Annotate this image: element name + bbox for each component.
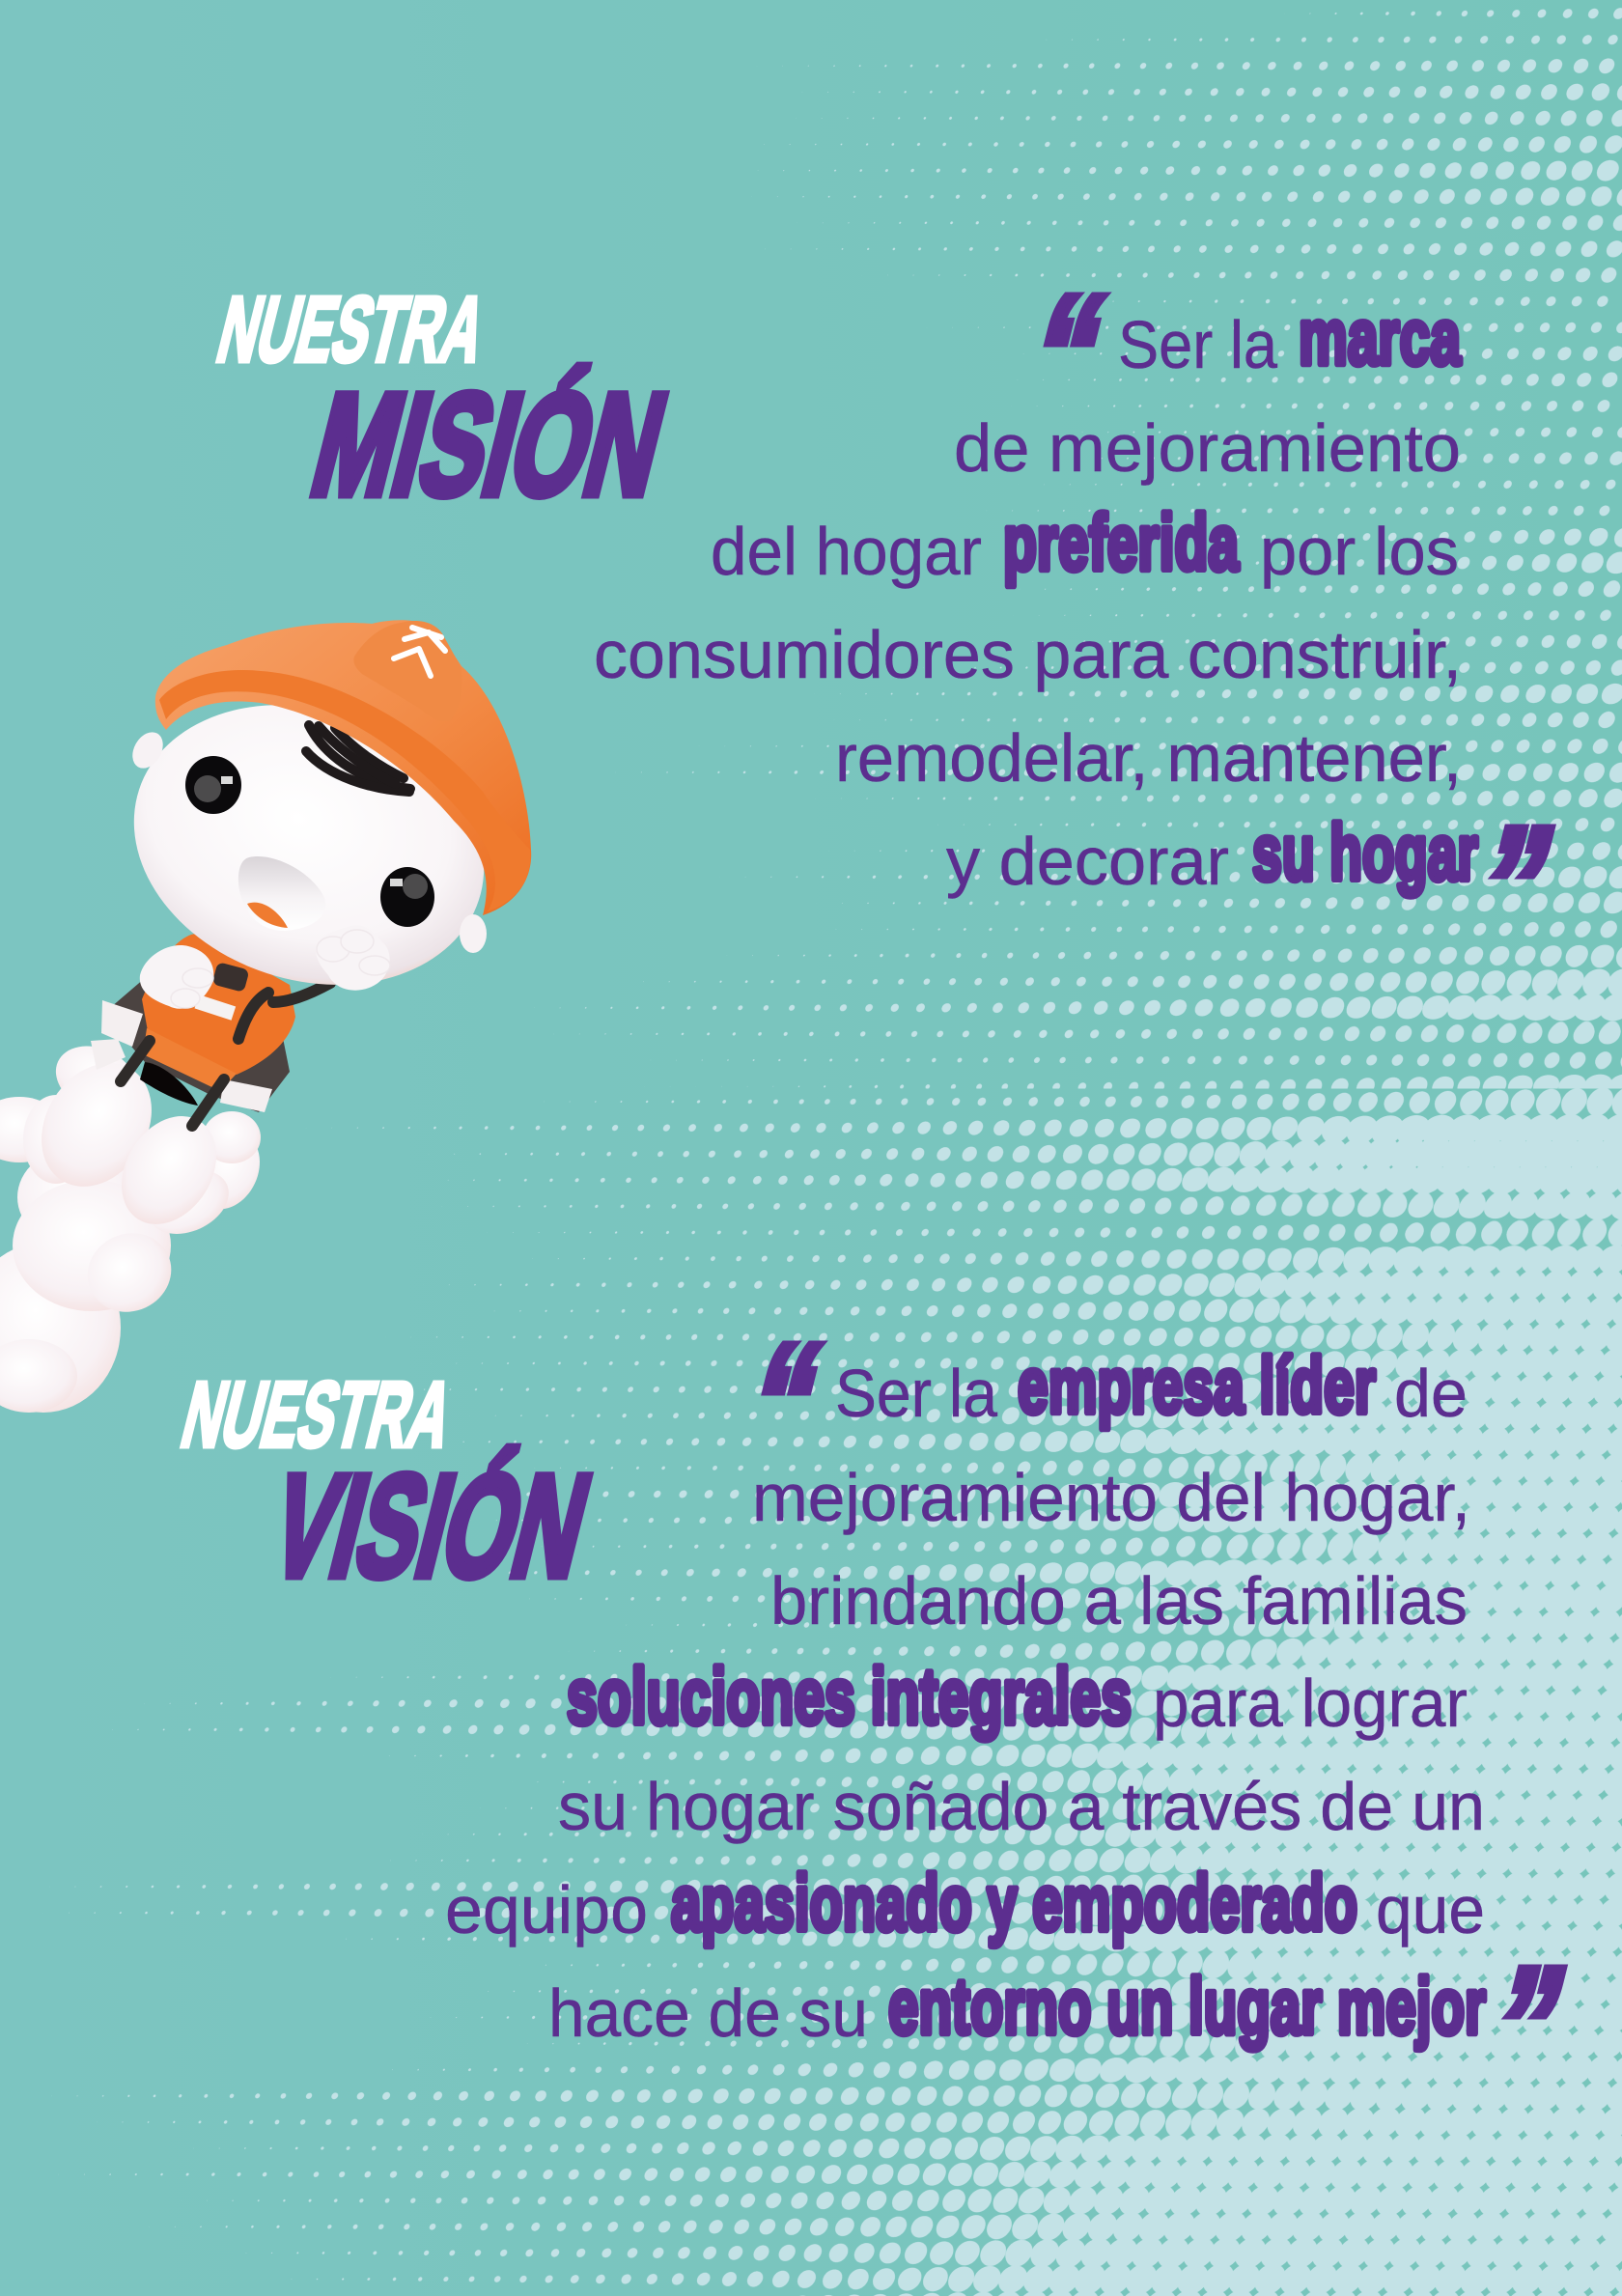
vision statement text: hace de su	[548, 1975, 868, 2051]
heading: Nuestra Misión: MISIÓN	[298, 364, 681, 525]
vision statement text: Ser la	[835, 1356, 997, 1431]
vision statement text: empresa líder	[1018, 1342, 1376, 1430]
mission statement text	[594, 294, 1478, 899]
mission statement text: por los	[1260, 514, 1459, 589]
vision statement text: soluciones integrales	[567, 1653, 1132, 1741]
heading: Nuestra Visión: VISIÓN	[257, 1445, 604, 1607]
vision statement text: para lograr	[1153, 1666, 1468, 1741]
vision statement text: que	[1376, 1872, 1485, 1947]
mission statement text: marca	[1299, 294, 1462, 381]
heading: Nuestra Misión	[209, 277, 681, 525]
vision statement text: su hogar soñado a través de un	[558, 1769, 1485, 1844]
vision statement text: equipo	[445, 1872, 648, 1947]
smoke cloud	[0, 1033, 272, 1413]
mission statement text: su hogar	[1252, 809, 1478, 897]
vision statement text: brindando a las familias	[770, 1563, 1468, 1638]
jacket and harness	[91, 934, 330, 1126]
heading: Nuestra Visión	[173, 1362, 604, 1607]
mouth	[238, 856, 325, 931]
mission statement text: del hogar	[711, 514, 982, 589]
vision statement text: mejoramiento del hogar,	[752, 1460, 1470, 1535]
opening quote: “	[731, 1309, 838, 1493]
hands	[140, 925, 390, 1009]
mission statement text: y decorar	[946, 824, 1229, 899]
eyes	[185, 756, 434, 927]
vision statement text: de	[1394, 1356, 1468, 1431]
mission statement text: preferida	[1003, 499, 1240, 587]
opening quote: “	[1013, 261, 1122, 444]
panel: vision	[173, 1309, 1581, 2116]
hair	[306, 725, 410, 792]
mission statement text: remodelar, mantener,	[835, 720, 1462, 796]
heading: Nuestra Misión: NUESTRA	[209, 277, 496, 381]
mission statement text: consumidores para construir,	[594, 617, 1462, 692]
vision statement text	[445, 1342, 1486, 2051]
mission statement text: de mejoramiento	[954, 410, 1461, 486]
closing quote: ”	[1474, 1933, 1581, 2116]
mission statement text: Ser la	[1118, 307, 1277, 382]
ears	[126, 727, 487, 953]
heading: Nuestra Visión: NUESTRA	[173, 1362, 463, 1467]
mascot: flying construction character on smoke cloud	[0, 620, 531, 1413]
head	[98, 661, 520, 1028]
hard hat	[155, 620, 531, 915]
panel: mission	[209, 261, 1570, 976]
closing quote: ”	[1461, 793, 1570, 976]
